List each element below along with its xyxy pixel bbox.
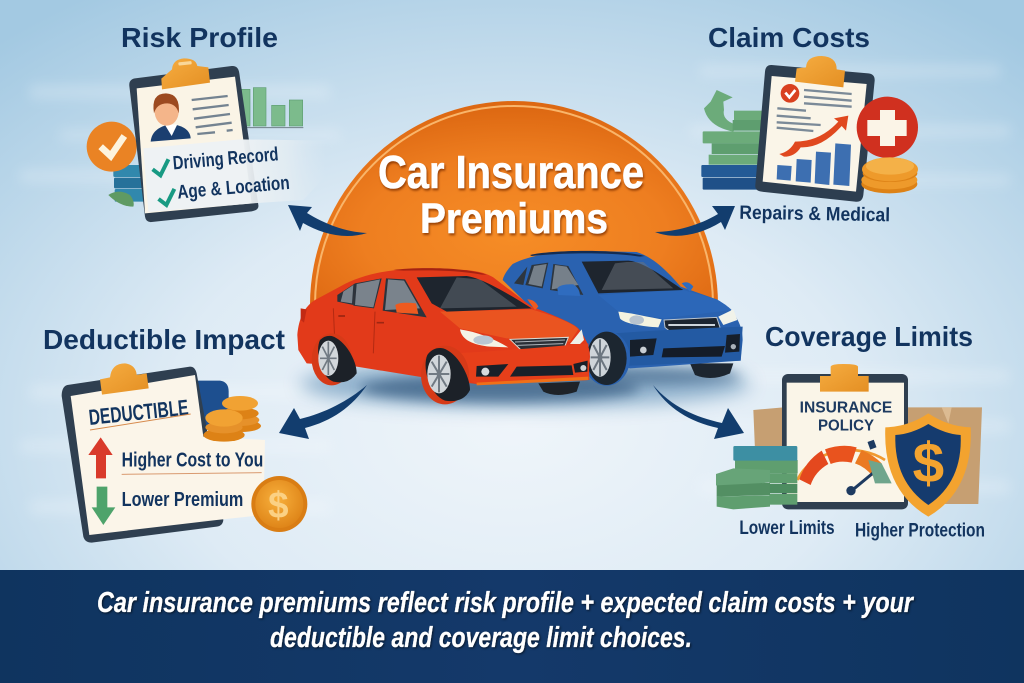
background light streaks xyxy=(20,65,1010,514)
clipboard xyxy=(755,56,875,202)
icon: dollar coin xyxy=(251,476,307,532)
arrow: to claim costs xyxy=(655,206,735,236)
blue folder xyxy=(197,381,229,430)
icon: orange check badge xyxy=(87,122,137,172)
icon: shield: $ xyxy=(913,433,944,496)
clipboard: POLICY xyxy=(818,418,874,435)
form lines xyxy=(192,96,233,134)
title xyxy=(378,146,644,243)
icon: coin stack xyxy=(203,396,261,442)
clipboard: Higher Cost to You xyxy=(122,450,263,472)
icon: teal stack and leaves xyxy=(108,165,146,207)
icon: money stacks xyxy=(716,446,798,509)
icon: shield xyxy=(885,413,971,517)
panel: claim costs xyxy=(701,56,918,226)
ground shadow under cars xyxy=(300,360,750,408)
icon: coin stack xyxy=(861,157,918,193)
cars xyxy=(297,251,743,404)
risk bar chart xyxy=(242,88,303,128)
rising arrow xyxy=(779,116,848,157)
red up arrow xyxy=(88,437,113,478)
arrow: to deductible impact xyxy=(279,385,367,439)
gauge xyxy=(797,440,892,495)
clipboard: INSURANCE xyxy=(800,400,893,417)
cardboard boxes xyxy=(753,407,982,504)
panel: coverage limits xyxy=(716,364,985,542)
gauge labels: Higher Protection xyxy=(855,521,985,542)
checklist text: Driving Record xyxy=(172,144,279,175)
footer band xyxy=(0,570,1024,683)
icon: medical cross xyxy=(857,97,918,158)
arrow: to risk profile xyxy=(288,205,367,236)
title: Premiums xyxy=(420,195,608,243)
green down arrow xyxy=(92,487,115,525)
person icon xyxy=(151,93,191,142)
footer text: deductible and coverage limit choices. xyxy=(270,622,692,654)
repairs text: Repairs & Medical xyxy=(739,203,890,226)
clipboard xyxy=(782,364,908,509)
checklist text: Age & Location xyxy=(176,173,291,204)
clipboard: Lower Premium xyxy=(122,489,243,511)
bars xyxy=(777,143,851,186)
footer text xyxy=(97,587,914,654)
clipboard xyxy=(62,363,265,543)
icon: dollar coin: $ xyxy=(268,484,289,525)
checklist text xyxy=(151,144,291,206)
heading: claim costs: Claim Costs xyxy=(708,22,870,53)
panel: deductible impact xyxy=(62,363,307,543)
central orange dome xyxy=(310,101,718,305)
red car xyxy=(297,268,590,404)
gauge labels xyxy=(739,518,985,542)
heading: risk profile: Risk Profile xyxy=(121,22,278,53)
gauge labels: Lower Limits xyxy=(739,518,835,539)
blue car xyxy=(503,251,743,386)
heading: coverage limits: Coverage Limits xyxy=(765,321,973,352)
clipboard xyxy=(129,58,325,222)
title: Car Insurance xyxy=(378,146,644,198)
clipboard: DEDUCTIBLE xyxy=(88,395,190,430)
icon: money stacks xyxy=(701,90,764,190)
arrow: to coverage limits xyxy=(653,385,744,439)
panel: risk profile xyxy=(87,58,325,222)
heading: deductible impact: Deductible Impact xyxy=(43,324,285,355)
